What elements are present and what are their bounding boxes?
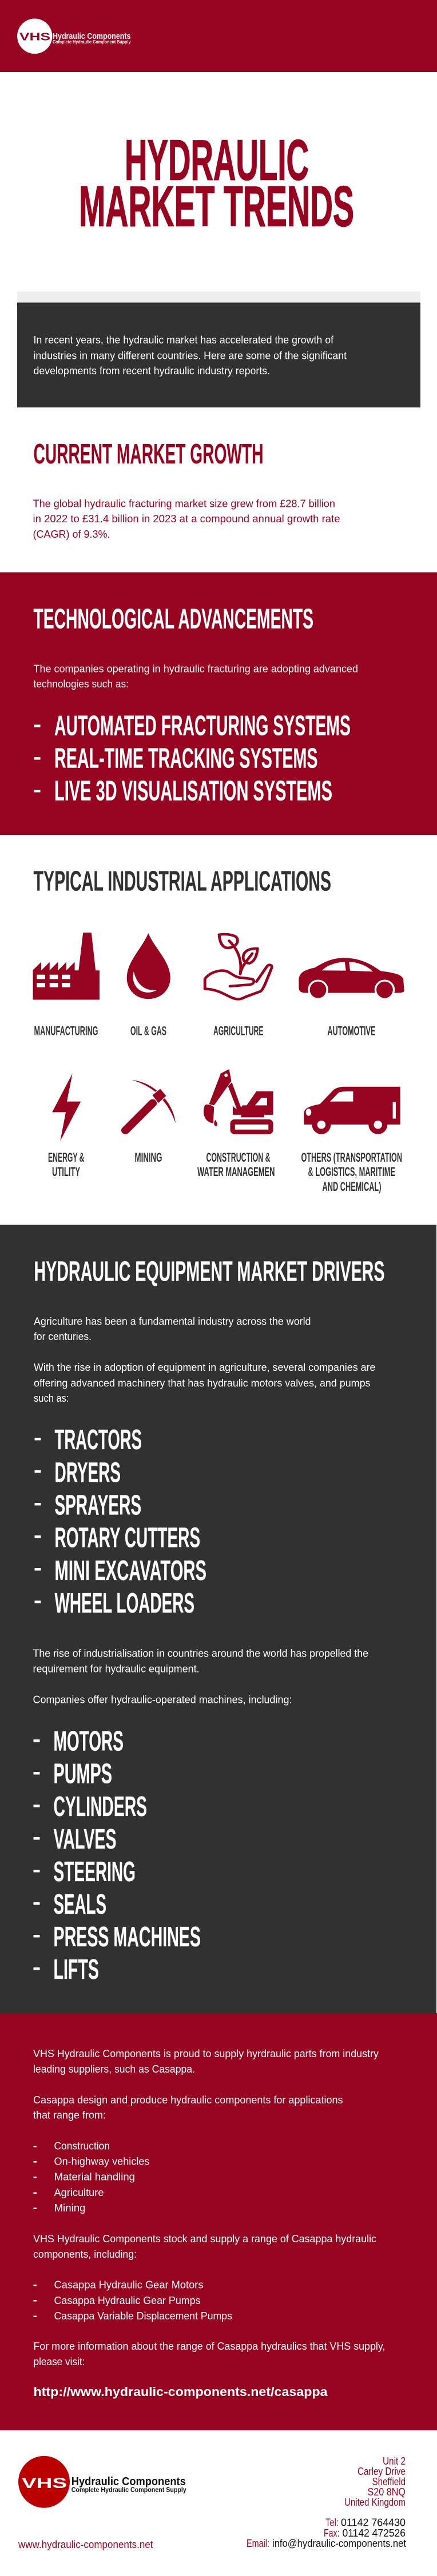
address bbox=[344, 2455, 406, 2508]
address: Carley Drive bbox=[357, 2465, 406, 2477]
label: oil and gas: OIL & GAS bbox=[130, 1024, 166, 1038]
supplier text bbox=[33, 2047, 379, 2121]
intro text: In recent years, the hydraulic market has accelerated the growth of bbox=[33, 334, 334, 346]
address: Sheffield bbox=[372, 2475, 406, 2487]
panel: hydraulic equipment market drivers bbox=[0, 1225, 436, 2013]
icon: factory bbox=[33, 933, 100, 1000]
label: construction and water management bbox=[197, 1150, 275, 1179]
footer bbox=[18, 2455, 406, 2550]
Casappa product list bbox=[33, 2279, 232, 2322]
Casappa product list: Casappa Hydraulic Gear Pumps bbox=[54, 2294, 200, 2306]
industrialisation text bbox=[33, 1648, 368, 1705]
hydraulic machines list: MOTORS bbox=[54, 1726, 124, 1757]
agriculture text: such as: bbox=[34, 1393, 69, 1404]
logo: VHS Hydraulic Components (white): Hydraulic Components bbox=[53, 32, 130, 41]
title bbox=[79, 128, 354, 239]
agriculture text: for centuries. bbox=[34, 1331, 92, 1342]
website: www.hydraulic-components.net bbox=[18, 2538, 153, 2550]
applications list bbox=[33, 2139, 150, 2214]
hydraulic machines list: LIFTS bbox=[54, 1954, 99, 1985]
address: S20 8NQ bbox=[367, 2486, 406, 2498]
logo: VHS Hydraulic Components (red): Hydraulic Components bbox=[71, 2475, 186, 2488]
contact details: Fax: bbox=[324, 2527, 340, 2539]
contact details: Tel: bbox=[325, 2517, 339, 2528]
label: energy and utility bbox=[48, 1150, 85, 1179]
label: others bbox=[301, 1150, 402, 1194]
industrialisation text: requirement for hydraulic equipment. bbox=[33, 1663, 199, 1674]
hydraulic machines list: PRESS MACHINES bbox=[54, 1921, 201, 1953]
industrialisation text: Companies offer hydraulic-operated machines, including: bbox=[33, 1694, 292, 1705]
address: Unit 2 bbox=[383, 2455, 406, 2467]
supplier text: that range from: bbox=[33, 2109, 106, 2121]
hydraulic machines list: CYLINDERS bbox=[54, 1791, 147, 1822]
stock text: components, including: bbox=[33, 2248, 137, 2260]
contact details: 01142 472526 bbox=[342, 2527, 406, 2539]
contact details: Email: bbox=[247, 2537, 269, 2549]
icon: oil drop bbox=[127, 933, 170, 999]
agriculture machinery list: ROTARY CUTTERS bbox=[55, 1522, 200, 1553]
icon: excavator bbox=[204, 1069, 273, 1134]
heading: CURRENT MARKET GROWTH bbox=[33, 438, 263, 470]
supplier text: VHS Hydraulic Components is proud to supply hyrdraulic parts from industry bbox=[33, 2047, 379, 2059]
logo: VHS Hydraulic Components (red) bbox=[18, 2456, 186, 2508]
agriculture machinery list: WHEEL LOADERS bbox=[55, 1587, 194, 1619]
icon: lightning bolt bbox=[52, 1074, 81, 1141]
hydraulic machines list: VALVES bbox=[54, 1823, 117, 1855]
contact details: 01142 764430 bbox=[341, 2517, 406, 2528]
hydraulic machines list: SEALS bbox=[54, 1889, 106, 1920]
more information text bbox=[33, 2340, 386, 2367]
growth text: The global hydraulic fracturing market size grew from £28.7 billion bbox=[33, 498, 335, 510]
address: United Kingdom bbox=[344, 2496, 406, 2508]
Casappa product list: Casappa Hydraulic Gear Motors bbox=[54, 2279, 204, 2290]
technology text: technologies such as: bbox=[33, 678, 129, 690]
agriculture machinery list: TRACTORS bbox=[55, 1424, 142, 1455]
label: automotive: AUTOMOTIVE bbox=[327, 1024, 375, 1038]
technology list bbox=[34, 710, 351, 807]
technology text bbox=[33, 663, 358, 690]
label: construction and water management: WATER MANAGEMEN bbox=[197, 1165, 275, 1179]
technology text: The companies operating in hydraulic fracturing are adopting advanced bbox=[33, 663, 358, 674]
contact details bbox=[247, 2517, 406, 2549]
label: energy and utility: ENERGY & bbox=[48, 1150, 85, 1165]
intro panel bbox=[17, 291, 420, 407]
applications list: Material handling bbox=[54, 2170, 135, 2183]
icon: van bbox=[304, 1087, 400, 1134]
icon: pickaxe bbox=[125, 1080, 176, 1130]
logo: VHS Hydraulic Components (red): VHS bbox=[22, 2475, 67, 2491]
intro text: developments from recent hydraulic industry reports. bbox=[33, 365, 270, 377]
label: manufacturing: MANUFACTURING bbox=[34, 1024, 98, 1038]
label: agriculture: AGRICULTURE bbox=[213, 1024, 263, 1038]
agriculture text bbox=[34, 1315, 375, 1404]
icon: plant in hand bbox=[205, 934, 272, 999]
logo: VHS Hydraulic Components (white): Complete Hydraulic Component Supply bbox=[53, 39, 131, 45]
more information text: please visit: bbox=[33, 2355, 85, 2367]
label: mining: MINING bbox=[135, 1150, 162, 1165]
applications list: On-highway vehicles bbox=[54, 2155, 150, 2167]
intro text bbox=[33, 334, 347, 377]
stock text bbox=[33, 2233, 376, 2260]
growth text: (CAGR) of 9.3%. bbox=[33, 529, 110, 540]
label: energy and utility: UTILITY bbox=[52, 1165, 80, 1179]
agriculture machinery list: SPRAYERS bbox=[55, 1489, 141, 1521]
agriculture machinery list: DRYERS bbox=[55, 1457, 121, 1488]
label: construction and water management: CONSTRUCTION & bbox=[206, 1150, 270, 1165]
section: current market growth bbox=[33, 438, 340, 540]
Casappa product list: Casappa Variable Displacement Pumps bbox=[54, 2310, 232, 2322]
growth text bbox=[33, 498, 340, 540]
link: http://www.hydraulic-components.net/casappa bbox=[33, 2385, 328, 2399]
growth text: in 2022 to £31.4 billion in 2023 at a compound annual growth rate bbox=[33, 513, 340, 525]
agriculture machinery list: MINI EXCAVATORS bbox=[55, 1555, 206, 1586]
agriculture text: offering advanced machinery that has hydraulic motors valves, and pumps bbox=[34, 1377, 371, 1389]
logo: VHS Hydraulic Components (white): VHS bbox=[19, 31, 50, 42]
section: typical industrial applications bbox=[33, 865, 404, 1194]
panel: VHS and Casappa bbox=[0, 2013, 437, 2430]
header band bbox=[0, 0, 437, 72]
applications list: Mining bbox=[54, 2202, 86, 2214]
agriculture machinery list bbox=[34, 1424, 206, 1619]
intro text: industries in many different countries. Here are some of the significant bbox=[33, 350, 347, 361]
agriculture text: With the rise in adoption of equipment in agriculture, several companies are bbox=[34, 1362, 375, 1373]
agriculture text: Agriculture has been a fundamental industry across the world bbox=[34, 1315, 311, 1327]
label: others: AND CHEMICAL) bbox=[323, 1179, 381, 1194]
supplier text: leading suppliers, such as Casappa. bbox=[33, 2063, 195, 2075]
industrialisation text: The rise of industrialisation in countries around the world has propelled the bbox=[33, 1648, 368, 1659]
applications list: Agriculture bbox=[54, 2186, 104, 2198]
hydraulic machines list: PUMPS bbox=[54, 1758, 112, 1790]
hydraulic machines list: STEERING bbox=[54, 1856, 136, 1887]
contact details: info@hydraulic-components.net bbox=[272, 2537, 406, 2549]
hydraulic machines list bbox=[33, 1726, 201, 1985]
icon: car bbox=[299, 958, 404, 999]
logo: VHS Hydraulic Components (white) bbox=[17, 18, 131, 54]
supplier text: Casappa design and produce hydraulic components for applications bbox=[33, 2094, 343, 2106]
logo: VHS Hydraulic Components (red): Complete Hydraulic Component Supply bbox=[71, 2487, 186, 2494]
more information text: For more information about the range of Casappa hydraulics that VHS supply, bbox=[33, 2340, 386, 2352]
applications list: Construction bbox=[54, 2139, 110, 2152]
stock text: VHS Hydraulic Components stock and supply a range of Casappa hydraulic bbox=[33, 2233, 376, 2245]
panel: technological advancements bbox=[0, 573, 437, 835]
